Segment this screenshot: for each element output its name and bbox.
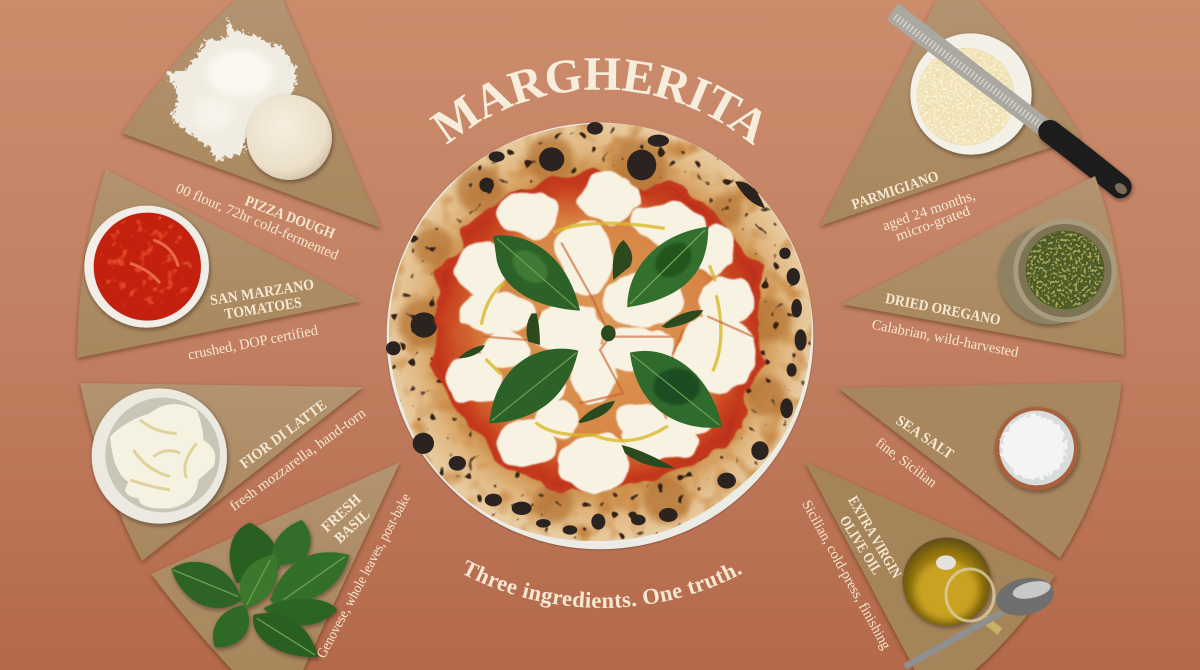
- panel: pizza dough: [122, 0, 381, 228]
- description: sea salt: fine, Sicilian: [872, 435, 940, 491]
- panel: san marzano tomatoes: [77, 169, 361, 358]
- icon: oregano jar: [998, 219, 1117, 324]
- sauce streaks: [483, 243, 753, 403]
- sauce: [433, 173, 763, 490]
- panel: fior di latte: [80, 383, 363, 561]
- crust charring patches: [398, 135, 792, 523]
- label: olive oil: OLIVE OIL: [836, 513, 884, 578]
- panel: dried oregano: [841, 176, 1124, 355]
- icon: mozzarella bowl: [92, 388, 227, 524]
- pizza: [386, 122, 813, 549]
- description: parmigiano line 2: micro-grated: [894, 203, 973, 245]
- icon: basil sprig: [172, 520, 349, 657]
- icon: flour and dough ball: [167, 17, 332, 180]
- basil leaf: top left: [493, 235, 580, 311]
- title: MARGHERITA: [429, 58, 762, 146]
- description: oregano: Calabrian, wild-harvested: [870, 317, 1020, 361]
- label: sea salt: SEA SALT: [893, 413, 956, 463]
- crust spots: [389, 123, 812, 541]
- label: parmigiano: PARMIGIANO: [850, 169, 941, 213]
- basil leaf: bottom right: [630, 351, 722, 428]
- label: san marzano: SAN MARZANO: [209, 277, 315, 309]
- icon: salt bowl: [995, 407, 1078, 490]
- label: tomatoes: TOMATOES: [223, 295, 303, 323]
- description: basil: Genovese, whole leaves, post-bake: [314, 491, 414, 661]
- panel: extra virgin olive oil: [805, 462, 1057, 670]
- basil leaf: bottom left: [489, 349, 578, 423]
- olive oil drizzle: [482, 223, 721, 441]
- panel: parmigiano: [820, 0, 1129, 226]
- description: pizza dough: 00 flour, 72hr cold-fermented: [173, 180, 341, 264]
- cheese: [446, 173, 756, 491]
- label: pizza dough: PIZZA DOUGH: [242, 193, 337, 243]
- icon: olive oil jar and spoon: [903, 538, 1057, 667]
- label: dried oregano: DRIED OREGANO: [884, 291, 1002, 329]
- basil leaf: top right: [627, 227, 708, 307]
- label: fior di latte: FIOR DI LATTE: [237, 397, 330, 472]
- icon: tomato bowl: [84, 206, 209, 328]
- crust: [389, 123, 812, 541]
- label: extra virgin: EXTRA VIRGIN: [844, 494, 904, 581]
- tagline: Three ingredients. One truth.: [464, 560, 742, 608]
- icon: parmesan bowl and zester: [887, 3, 1129, 196]
- description: fior di latte: fresh mozzarella, hand-torn: [227, 405, 370, 515]
- label: basil: BASIL: [332, 507, 373, 547]
- description: tomatoes: crushed, DOP certified: [187, 322, 320, 363]
- description: parmigiano line 1: aged 24 months,: [881, 188, 977, 234]
- panel: sea salt: [838, 382, 1122, 558]
- plate: [387, 123, 813, 549]
- crust browning: [389, 123, 812, 541]
- basil leaf pieces: [458, 240, 703, 468]
- panel: fresh basil: [151, 462, 400, 670]
- label: fresh: FRESH: [319, 491, 365, 536]
- description: olive oil: Sicilian, cold-press, finishing: [798, 498, 894, 652]
- crust char marks: [386, 122, 807, 535]
